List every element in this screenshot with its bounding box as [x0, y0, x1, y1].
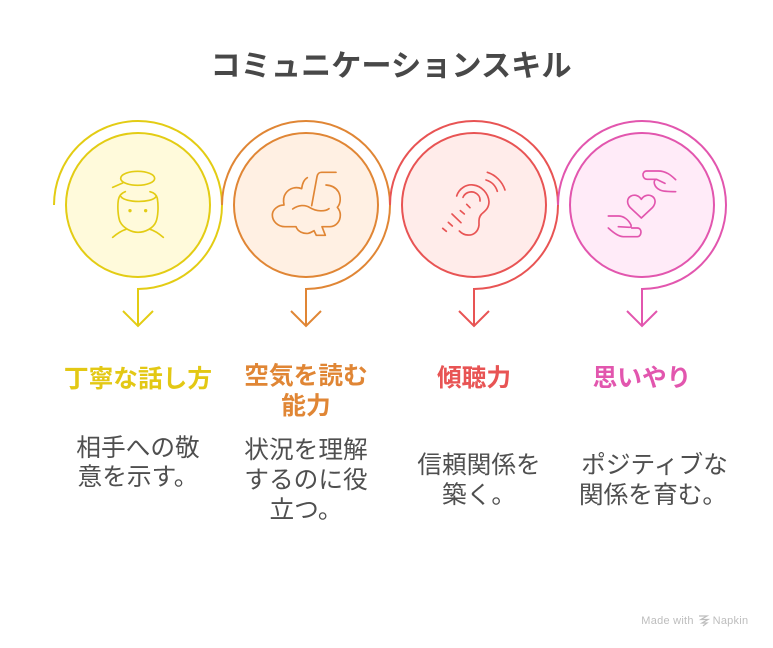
text 3: 築く。 [442, 481, 516, 509]
outer arc and arrow 4 [558, 121, 726, 326]
step 2 graphic: reading the room [222, 121, 390, 326]
inner circle 3 [402, 133, 546, 277]
text 1: 意を示す。 [78, 463, 198, 491]
text 1: 相手への敬 [76, 434, 200, 462]
outer arc and arrow 2 [222, 121, 390, 326]
outer arc and arrow 1 [54, 121, 222, 326]
step 4 graphic: compassion [558, 121, 726, 326]
icon: person with halo [113, 171, 163, 237]
inner circle 1 [66, 133, 210, 277]
footer: made with Napkin: Napkin [713, 615, 748, 627]
heading 2: 能力 [281, 392, 331, 420]
text 4: ポジティブな [581, 451, 728, 479]
title: コミュニケーションスキル [210, 50, 572, 83]
heading 3: 傾聴力 [437, 364, 511, 392]
text 2: 状況を理解 [244, 436, 368, 464]
text 4: 関係を育む。 [579, 481, 727, 509]
step 1 graphic: polite speech [54, 121, 222, 326]
icon: napkin logo [699, 616, 708, 626]
step 3 graphic: active listening [390, 121, 558, 326]
text 2: 立つ。 [269, 496, 343, 524]
text 2: するのに役 [244, 466, 368, 494]
inner circle 2 [234, 133, 378, 277]
footer: made with Napkin [641, 615, 748, 627]
icon: hands and heart [608, 171, 676, 237]
inner circle 4 [570, 133, 714, 277]
heading 1: 丁寧な話し方 [64, 365, 212, 393]
outer arc and arrow 3 [390, 121, 558, 326]
text 3: 信頼関係を [417, 451, 541, 479]
heading 2: 空気を読む [244, 362, 368, 390]
heading 4: 思いやり [593, 364, 691, 392]
icon: ear [443, 172, 505, 235]
icon: brain [272, 172, 340, 235]
footer: made with Napkin: Made with [641, 615, 694, 627]
